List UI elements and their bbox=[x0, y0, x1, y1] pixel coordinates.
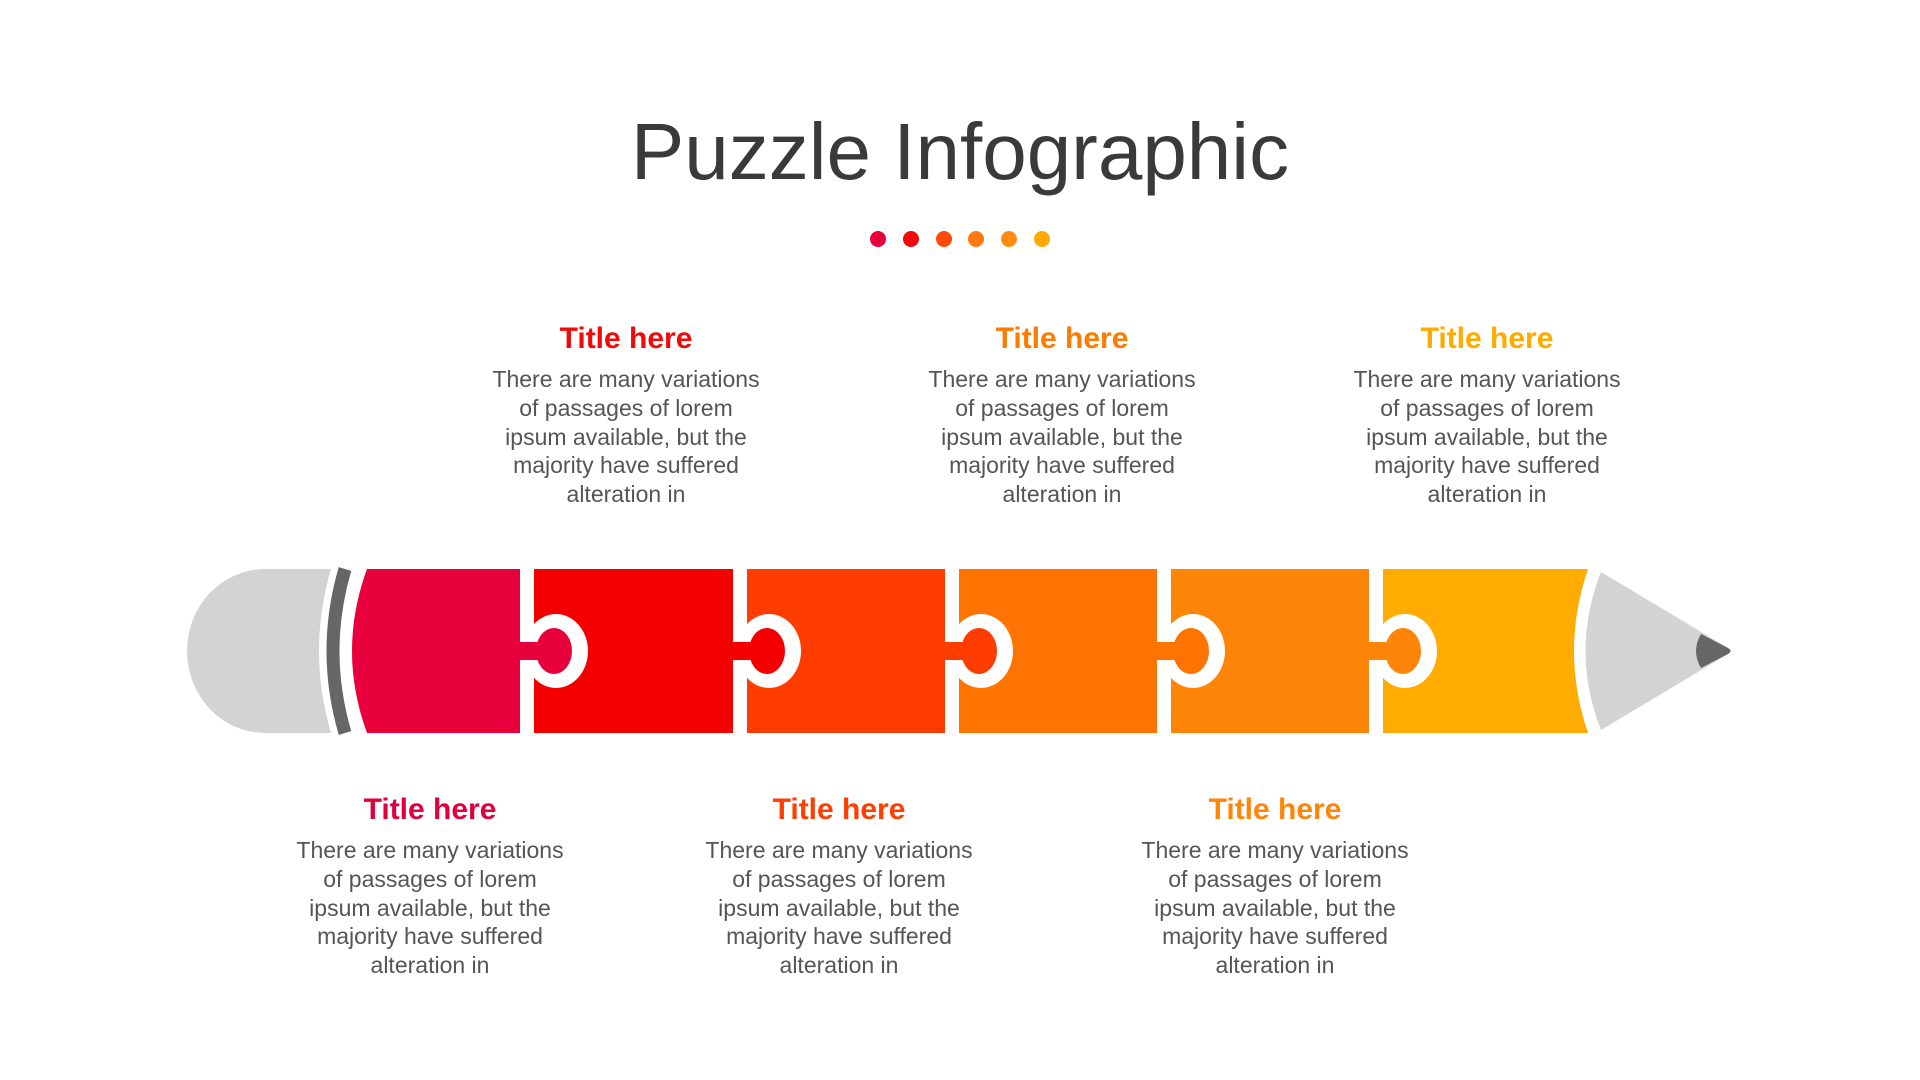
text: bottom 2: alteration in bbox=[780, 952, 898, 978]
text: bottom 1 bbox=[296, 793, 564, 978]
text: bottom 3: of passages of lorem bbox=[1168, 866, 1382, 892]
text: bottom 2 bbox=[705, 793, 973, 978]
text: top 3: There are many variations bbox=[1353, 366, 1621, 392]
text: bottom 3: There are many variations bbox=[1141, 837, 1409, 863]
text: top 1: There are many variations bbox=[492, 366, 760, 392]
text: bottom 1: majority have suffered bbox=[317, 923, 543, 949]
text: bottom 2: majority have suffered bbox=[726, 923, 952, 949]
text: top 2: of passages of lorem bbox=[955, 395, 1169, 421]
text: top 1: alteration in bbox=[567, 481, 685, 507]
text: top 2: alteration in bbox=[1003, 481, 1121, 507]
text: bottom 3: alteration in bbox=[1216, 952, 1334, 978]
text: top 2 bbox=[928, 322, 1196, 507]
text: bottom 1: Title here bbox=[364, 793, 496, 826]
text: top 1: of passages of lorem bbox=[519, 395, 733, 421]
text: top 3: alteration in bbox=[1428, 481, 1546, 507]
text: bottom 3: ipsum available, but the bbox=[1154, 895, 1396, 921]
text: bottom 3: majority have suffered bbox=[1162, 923, 1388, 949]
text: top 2: There are many variations bbox=[928, 366, 1196, 392]
dots bbox=[870, 231, 1050, 247]
text: bottom 3 bbox=[1141, 793, 1409, 978]
text: bottom 3: Title here bbox=[1209, 793, 1341, 826]
pieces bbox=[352, 569, 1588, 733]
text: top 1: majority have suffered bbox=[513, 452, 739, 478]
text: top 2: majority have suffered bbox=[949, 452, 1175, 478]
text: top 3: of passages of lorem bbox=[1380, 395, 1594, 421]
text: bottom 1: of passages of lorem bbox=[323, 866, 537, 892]
text: top 3 bbox=[1353, 322, 1621, 507]
text: top 1 bbox=[492, 322, 760, 507]
connectors bbox=[518, 560, 1437, 740]
pencil tip bbox=[1586, 572, 1730, 730]
text: top 2: Title here bbox=[996, 322, 1128, 355]
text: top 1: ipsum available, but the bbox=[505, 424, 747, 450]
text: bottom 2: There are many variations bbox=[705, 837, 973, 863]
eraser bbox=[187, 569, 345, 733]
text: bottom 2: Title here bbox=[773, 793, 905, 826]
text: bottom 1: There are many variations bbox=[296, 837, 564, 863]
text: top 3: ipsum available, but the bbox=[1366, 424, 1608, 450]
text: top 1: Title here bbox=[560, 322, 692, 355]
text: bottom 1: ipsum available, but the bbox=[309, 895, 551, 921]
text: top 2: ipsum available, but the bbox=[941, 424, 1183, 450]
text: bottom 1: alteration in bbox=[371, 952, 489, 978]
title: Puzzle Infographic bbox=[631, 107, 1289, 196]
text: top 3: Title here bbox=[1421, 322, 1553, 355]
text: bottom 2: ipsum available, but the bbox=[718, 895, 960, 921]
text: top 3: majority have suffered bbox=[1374, 452, 1600, 478]
text: bottom 2: of passages of lorem bbox=[732, 866, 946, 892]
